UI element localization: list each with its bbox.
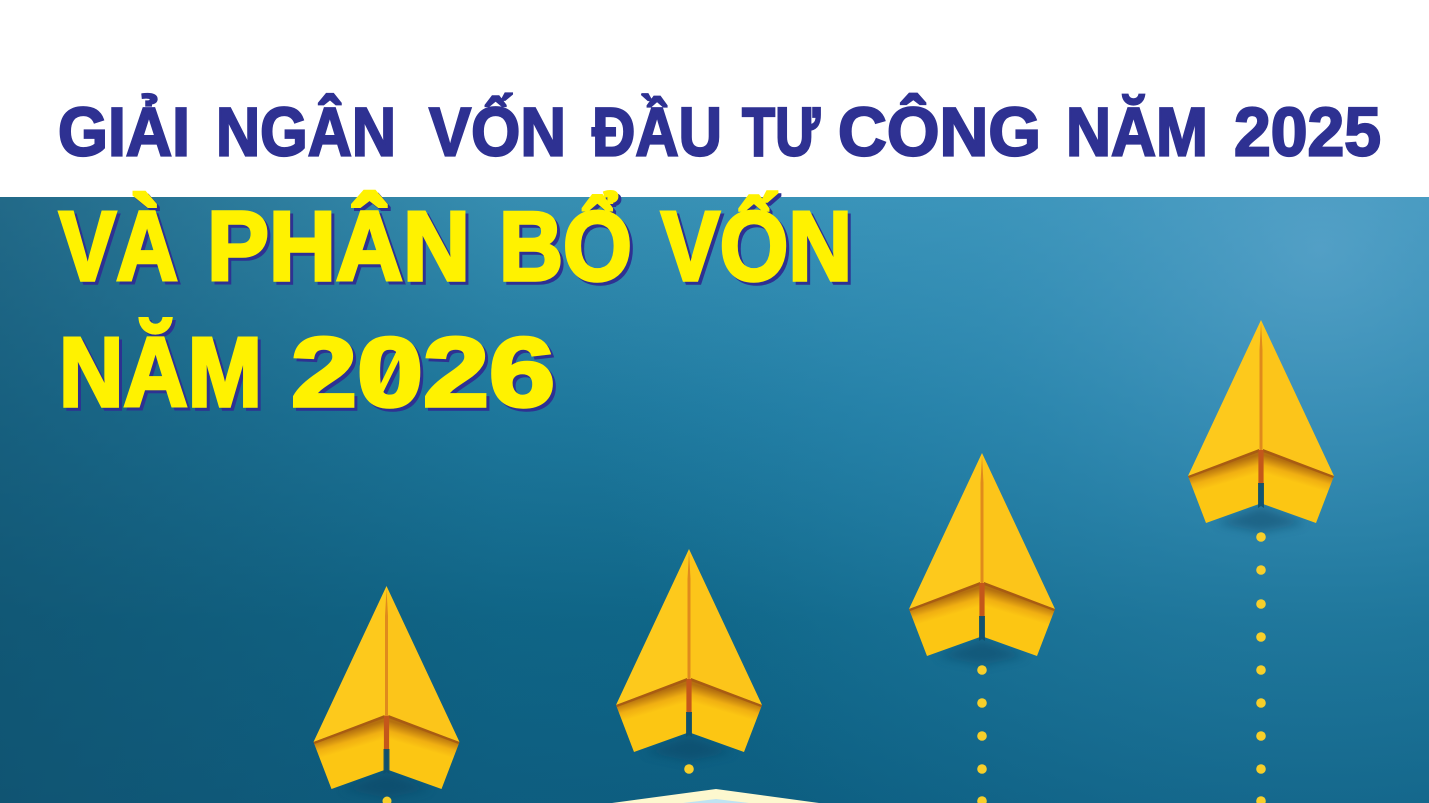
title line 1: navy heading: ĐẦU bbox=[592, 94, 722, 170]
title line 1: navy heading bbox=[58, 94, 1381, 170]
title line 2: yellow heading with navy shadow: BỔ bbox=[499, 191, 632, 301]
title line 1: navy heading: 2025 bbox=[1234, 94, 1381, 170]
dotted trail: plane 3 bbox=[977, 665, 987, 803]
background panel: teal gradient bbox=[0, 197, 1429, 803]
title line 3: yellow heading with navy shadow bbox=[59, 317, 555, 427]
title line 2: yellow heading with navy shadow: PHÂN bbox=[207, 191, 470, 301]
dotted trail: plane 1 bbox=[382, 796, 392, 803]
title line 1: navy heading: TƯ bbox=[742, 94, 821, 170]
dotted trail: plane 2 bbox=[684, 764, 694, 774]
title line 3: yellow heading with navy shadow: 2026 bbox=[291, 317, 555, 427]
icon: paper plane 3 bbox=[909, 453, 1055, 665]
title line 1: navy heading: CÔNG bbox=[838, 94, 1041, 170]
title line 1: navy heading: NĂM bbox=[1066, 94, 1208, 170]
title line 2: yellow heading with navy shadow bbox=[59, 191, 852, 301]
icon: paper plane 1 bbox=[314, 586, 460, 798]
title line 2: yellow heading with navy shadow: VÀ bbox=[59, 191, 178, 301]
title line 1: navy heading: GIẢI bbox=[58, 94, 190, 170]
bottom emblem tip: cream polygon with light-blue centre bbox=[612, 789, 819, 803]
dotted trail: plane 4 bbox=[1256, 532, 1266, 803]
icon: paper plane 2 bbox=[616, 549, 762, 761]
title line 1: navy heading: NGÂN bbox=[216, 94, 396, 170]
title line 2: yellow heading with navy shadow: VỐN bbox=[661, 191, 852, 301]
title line 1: navy heading: VỐN bbox=[429, 94, 566, 170]
icon: paper plane 4 bbox=[1188, 320, 1334, 532]
title line 3: yellow heading with navy shadow: NĂM bbox=[59, 317, 262, 427]
